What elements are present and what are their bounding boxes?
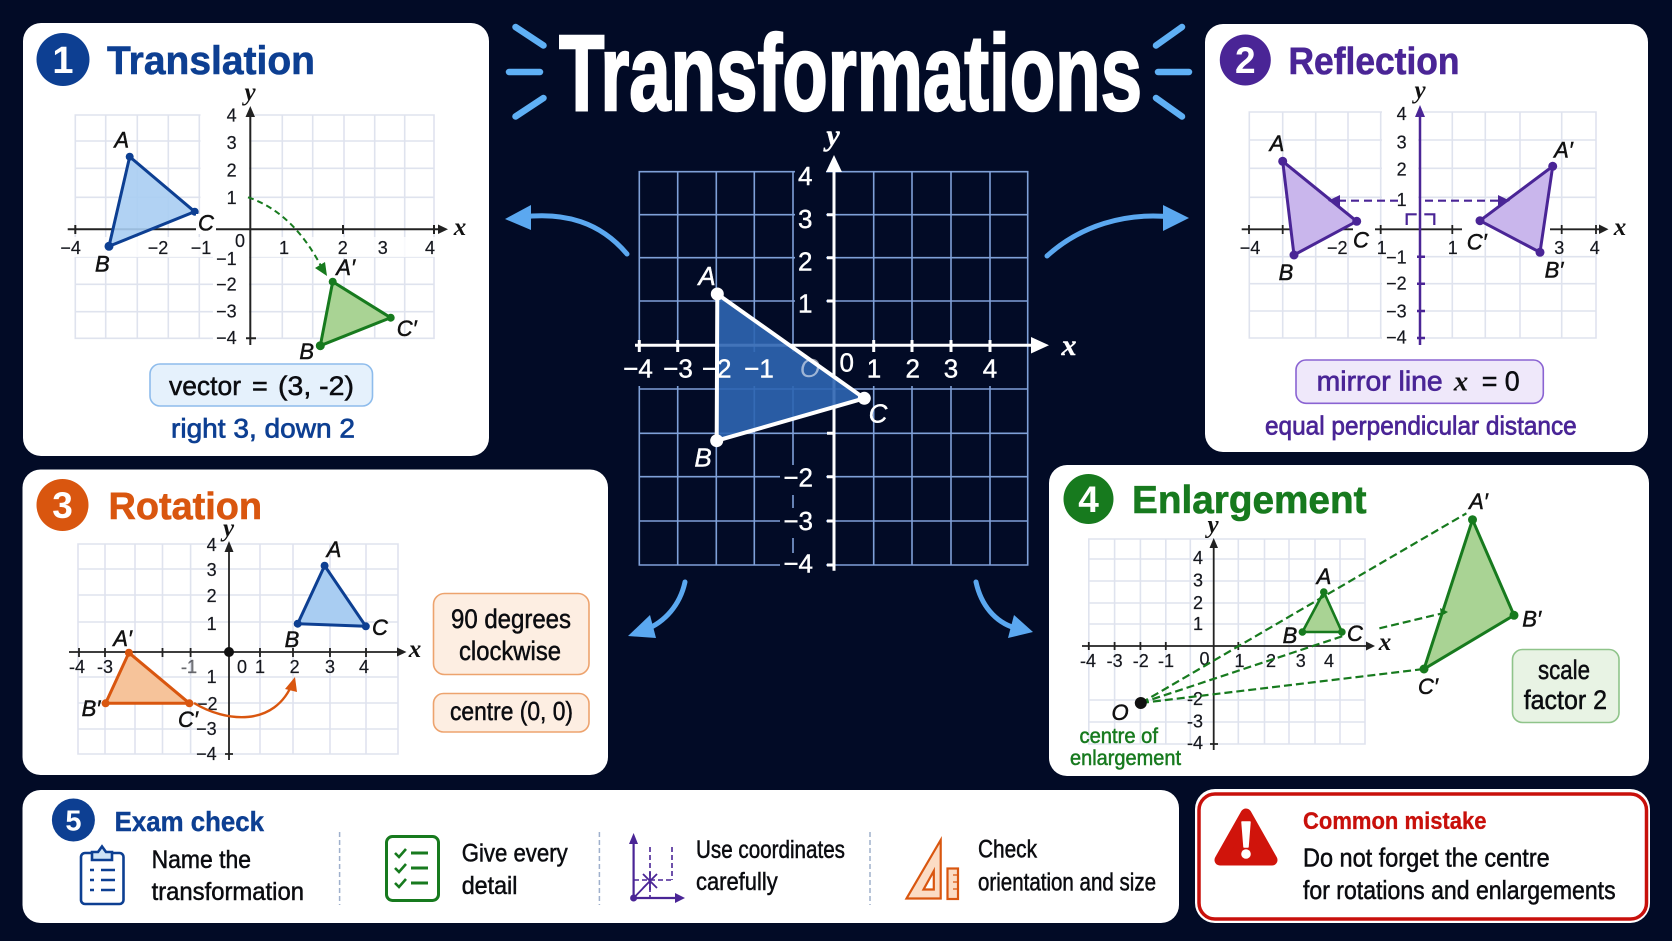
callout: 90 degrees clockwise <box>434 594 589 674</box>
text: name the transformation: transformation <box>152 878 304 906</box>
text: centre of enlargement: centre of <box>1080 725 1158 748</box>
icon: number 5: 5 <box>65 806 81 838</box>
chart: rotation grid: 3 <box>207 560 217 580</box>
chart: translation grid: 1 <box>227 188 237 208</box>
central axis labels: −1 <box>744 354 774 384</box>
chart: reflection grid: x <box>1613 214 1626 241</box>
chart: translation grid: 4 <box>227 106 237 126</box>
chart: translation grid: 0 <box>235 231 245 251</box>
chart: translation grid: x <box>453 214 466 241</box>
panel: reflection <box>1205 24 1648 452</box>
central axis labels: −4 <box>623 354 653 384</box>
triangle ABC: B <box>1279 260 1293 285</box>
central axis labels: 3 <box>944 354 958 384</box>
chart: enlargement grid: 0 <box>1199 649 1210 669</box>
chart: enlargement grid <box>1080 512 1391 753</box>
text: centre of enlargement <box>1070 725 1181 770</box>
arrow: centre to translation <box>505 205 627 254</box>
callout: scale factor 2: scale <box>1538 655 1590 685</box>
text: mistake description <box>1303 843 1616 905</box>
callout: vector: vector <box>169 371 241 401</box>
callout: mirror line: x <box>1453 366 1468 398</box>
icon: number 3 <box>36 479 88 531</box>
heading: common mistake: Common mistake <box>1303 808 1486 835</box>
callout: mirror line: mirror line <box>1317 366 1443 397</box>
icon: number 4 <box>1064 474 1114 524</box>
chart: rotation grid: 1 <box>255 657 265 677</box>
triangle A'B'C': A′ <box>111 626 133 651</box>
triangle A'B'C' <box>1418 489 1542 699</box>
icon: coordinate axes <box>629 833 685 903</box>
central axis labels: −3 <box>663 354 693 384</box>
point: centre O <box>1111 697 1147 725</box>
icon: number 3: 3 <box>52 485 73 526</box>
chart: rotation grid: −2 <box>197 694 218 714</box>
chart: rotation grid: 3 <box>325 657 335 677</box>
text: give every detail: detail <box>462 872 517 900</box>
icon: number 1 <box>36 33 90 86</box>
chart: reflection grid: 3 <box>1397 132 1407 152</box>
triangle A'B'C' <box>1467 138 1574 282</box>
heading: exam check: Exam check <box>115 806 264 837</box>
triangle A'B'C': B′ <box>1545 257 1564 282</box>
chart: enlargement grid: x <box>1378 629 1391 656</box>
chart: translation grid <box>60 79 466 348</box>
triangle ABC: A <box>1268 131 1284 156</box>
chart: translation grid: −3 <box>216 302 237 322</box>
central axis labels: A <box>696 261 716 291</box>
chart: rotation grid: -4 <box>69 657 85 677</box>
chart: rotation grid: 1 <box>207 614 217 634</box>
chart: enlargement grid: -2 <box>1187 689 1203 709</box>
chart: enlargement grid: 3 <box>1193 571 1203 591</box>
text: equal perpendicular distance: equal perpendicular distance <box>1265 410 1577 440</box>
callout: vector: (3, -2) <box>278 371 354 401</box>
triangle ABC: C <box>198 211 214 236</box>
callout: 90 degrees clockwise: clockwise <box>459 636 561 666</box>
triangle A'B'C': B <box>299 339 314 364</box>
triangle ABC <box>95 128 216 277</box>
heading: enlargement: Enlargement <box>1132 479 1367 522</box>
triangle ABC: B <box>285 627 299 652</box>
triangle A'B'C': A′ <box>1552 138 1574 163</box>
text: check orientation and size: orientation and size <box>978 869 1156 897</box>
chart: reflection grid: 3 <box>1554 238 1564 258</box>
icon: clipboard <box>81 846 124 904</box>
chart: enlargement grid: 2 <box>1193 593 1203 613</box>
central axis labels: O <box>800 353 820 383</box>
triangle ABC: A <box>325 537 341 562</box>
chart: translation grid: 2 <box>338 238 348 258</box>
text: mistake description: Do not forget the centre <box>1303 843 1550 873</box>
text: name the transformation: Name the <box>152 846 251 874</box>
triangle ABC: C <box>372 615 388 640</box>
text: check orientation and size <box>978 836 1156 897</box>
panel: exam check <box>22 790 1179 923</box>
chart: translation grid: 3 <box>378 238 388 258</box>
central axis labels: 4 <box>983 354 997 384</box>
heading: reflection: Reflection <box>1288 41 1460 83</box>
chart: reflection grid: 2 <box>1397 160 1407 180</box>
text: check orientation and size: Check <box>978 836 1037 864</box>
icon: set square and ruler <box>906 840 958 899</box>
chart: translation grid: 1 <box>279 238 289 258</box>
callout: scale factor 2: factor 2 <box>1524 685 1607 715</box>
chart: reflection grid: −2 <box>1386 273 1407 293</box>
chart: reflection grid: y <box>1411 77 1426 104</box>
icon: number 4: 4 <box>1078 479 1099 520</box>
callout: vector: = <box>252 371 268 401</box>
chart: rotation grid: −4 <box>196 744 217 764</box>
text: mistake description: for rotations and enlargements <box>1303 875 1616 905</box>
chart: enlargement grid: -1 <box>1158 651 1174 671</box>
callout: centre (0, 0): centre (0, 0) <box>450 696 573 726</box>
callout: mirror line: = 0 <box>1482 366 1520 397</box>
triangle ABC: B <box>1283 623 1297 648</box>
central coordinate chart <box>623 119 1076 581</box>
arrow: translation path <box>248 197 327 276</box>
central axis labels: x <box>1060 329 1076 362</box>
chart: rotation grid: y <box>220 515 235 542</box>
dashed rays from centre <box>1141 513 1466 703</box>
callout: mirror line <box>1296 360 1543 403</box>
chart: translation grid: −4 <box>60 238 81 258</box>
triangle ABC: A <box>1315 564 1331 589</box>
chart: reflection grid <box>1240 77 1626 347</box>
chart: rotation grid: 0 <box>237 657 247 677</box>
text: use coordinates carefully <box>696 836 845 896</box>
triangle ABC <box>1283 564 1363 648</box>
chart: reflection grid: −4 <box>1386 327 1407 347</box>
text: name the transformation <box>152 846 304 906</box>
arrow: centre to reflection <box>1047 205 1189 256</box>
chart: rotation grid: 2 <box>290 657 300 677</box>
triangle A'B'C': C′ <box>397 316 418 341</box>
text: use coordinates carefully: carefully <box>696 868 778 896</box>
chart: rotation grid: -1 <box>181 657 197 677</box>
chart: rotation grid <box>69 515 421 764</box>
chart: rotation grid: x <box>408 636 421 663</box>
triangle ABC: C <box>1347 621 1363 646</box>
point: centre O: O <box>1111 700 1129 725</box>
central axis labels: 1 <box>867 354 881 384</box>
text: centre of enlargement: enlargement <box>1070 747 1181 770</box>
heading: translation: Translation <box>107 39 315 83</box>
chart: reflection grid: −4 <box>1240 238 1260 258</box>
triangle A'B'C': A′ <box>1467 489 1489 514</box>
chart: reflection grid: −3 <box>1386 301 1407 321</box>
panel: common mistake <box>1195 789 1650 923</box>
callout: 90 degrees clockwise: 90 degrees <box>451 604 571 634</box>
text: give every detail: Give every <box>462 840 568 868</box>
central axis labels: 2 <box>798 247 812 277</box>
triangle A'B'C': C′ <box>178 707 199 732</box>
icon: title rays left <box>509 27 544 116</box>
callout: centre (0, 0) <box>434 694 589 732</box>
triangle A'B'C': C′ <box>1467 229 1488 254</box>
text: give every detail <box>462 840 568 900</box>
icon: number 2 <box>1220 34 1271 86</box>
chart: translation grid: −2 <box>216 275 237 295</box>
heading: rotation: Rotation <box>108 486 262 528</box>
icon: checklist <box>386 836 438 900</box>
panel: translation <box>23 23 489 456</box>
callout: scale factor 2 <box>1512 650 1619 722</box>
triangle A'B'C': C′ <box>1418 674 1439 699</box>
chart: enlargement grid: -2 <box>1133 651 1149 671</box>
chart: enlargement grid: -3 <box>1187 712 1203 732</box>
icon: number 1: 1 <box>52 40 74 82</box>
icon: warning triangle <box>1220 814 1272 860</box>
central axis labels: 1 <box>798 289 812 319</box>
central axis labels: 2 <box>905 354 920 384</box>
chart: reflection grid: 1 <box>1377 238 1387 258</box>
chart: enlargement grid: 2 <box>1266 651 1276 671</box>
chart: enlargement grid: 4 <box>1324 651 1334 671</box>
triangle A'B'C': B′ <box>82 696 101 721</box>
central axis labels: C <box>869 399 888 429</box>
chart: rotation grid: -3 <box>97 657 113 677</box>
callout: vector <box>150 364 372 406</box>
chart: enlargement grid: 1 <box>1234 651 1245 671</box>
triangle A'B'C' <box>82 626 199 732</box>
chart: reflection grid: 4 <box>1590 238 1600 258</box>
chart: translation grid: −1 <box>191 238 211 258</box>
chart: enlargement grid: 3 <box>1296 651 1306 671</box>
chart: rotation grid: 2 <box>207 586 217 606</box>
central axis labels: −2 <box>783 463 813 493</box>
chart: translation grid: 4 <box>425 238 435 258</box>
chart: enlargement grid: -4 <box>1080 651 1096 671</box>
central axis labels <box>623 119 1076 579</box>
icon: number 5 <box>52 798 95 842</box>
chart: rotation grid: 4 <box>359 657 369 677</box>
text: right 3, down 2: right 3, down 2 <box>171 413 355 443</box>
central axis labels: −3 <box>783 506 813 536</box>
chart: translation grid: y <box>241 79 256 106</box>
arrow: centre to enlargement <box>976 582 1033 638</box>
chart: rotation grid: 1 <box>207 667 217 687</box>
central axis labels: 0 <box>839 348 854 378</box>
chart: reflection grid: −2 <box>1327 238 1348 258</box>
central axis labels: y <box>823 119 840 152</box>
chart: reflection grid: −1 <box>1386 247 1407 267</box>
central axis labels: −4 <box>783 549 813 579</box>
triangle ABC: C <box>1353 227 1369 252</box>
arrow: centre to rotation <box>628 582 685 638</box>
triangle ABC <box>1268 131 1369 285</box>
chart: enlargement grid: 1 <box>1193 614 1203 634</box>
chart: rotation grid: −3 <box>196 719 217 739</box>
triangle A'B'C': A′ <box>334 255 356 280</box>
chart: translation grid: 3 <box>227 133 237 153</box>
chart: reflection grid: 1 <box>1397 190 1407 210</box>
triangle A'B'C' <box>299 255 418 364</box>
chart: enlargement grid: 4 <box>1193 548 1203 568</box>
chart: enlargement grid: y <box>1204 512 1219 539</box>
chart: translation grid: −2 <box>148 238 168 258</box>
triangle ABC: A <box>112 128 129 153</box>
panel: rotation <box>22 470 608 775</box>
arrow: perpendicular distance <box>1328 195 1510 225</box>
central axis labels: 3 <box>798 204 812 234</box>
triangle ABC: B <box>95 252 110 277</box>
chart: reflection grid: 4 <box>1397 104 1407 124</box>
central axis labels: 4 <box>798 161 812 191</box>
icon: title rays right <box>1156 27 1189 116</box>
triangle ABC <box>285 537 388 652</box>
chart: enlargement grid: -4 <box>1187 733 1203 753</box>
central triangle <box>710 288 871 447</box>
text: use coordinates carefully: Use coordinates <box>696 836 845 864</box>
chart: rotation grid: 4 <box>207 535 217 555</box>
chart: translation grid: 2 <box>227 161 237 181</box>
central axis labels: B <box>694 443 712 473</box>
central axis labels: −2 <box>702 354 732 384</box>
triangle A'B'C': B′ <box>1522 607 1542 632</box>
title: Transformations <box>559 12 1142 133</box>
panel: enlargement <box>1049 465 1649 776</box>
icon: number 2: 2 <box>1235 40 1256 81</box>
chart: translation grid: −4 <box>216 328 237 348</box>
chart: enlargement grid: -3 <box>1107 651 1123 671</box>
chart: translation grid: −1 <box>216 249 237 269</box>
arrow: rotation path <box>194 677 297 717</box>
chart: reflection grid: 1 <box>1448 238 1458 258</box>
